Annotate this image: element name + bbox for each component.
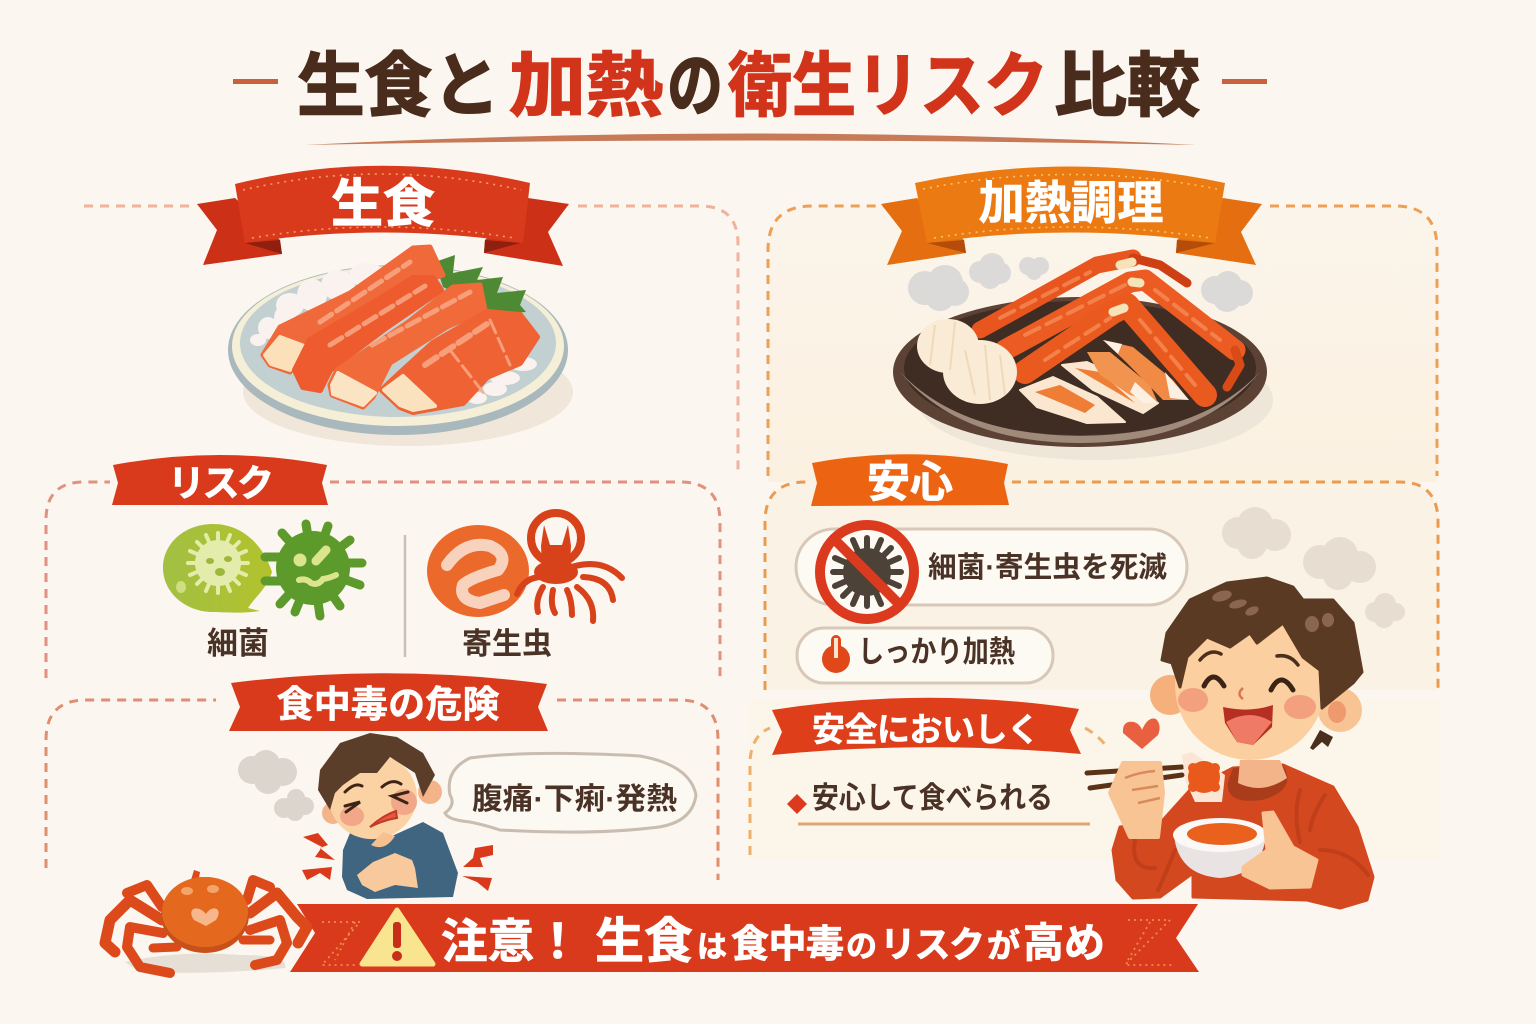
title [233,47,1267,145]
text: can eat safely: 安心して食べられる [812,782,1053,815]
illustration: happy child [1087,578,1373,908]
panel: cooked frame [768,206,1437,476]
title: の [667,47,723,125]
callout banner: warning [290,904,1199,972]
callout banner: warning: は [697,931,727,964]
heading: relief: 安心 [867,459,953,507]
panel: raw food frame [84,206,738,476]
panel: relief [765,454,1438,690]
callout banner: warning: リスク [880,924,985,965]
callout banner: warning: 高め [1023,920,1105,966]
title: 比較 [1054,47,1200,125]
icon: thermometer [822,635,850,673]
label: bacteria: 細菌 [207,626,269,661]
illustration: cooked crab plate [893,253,1273,460]
heading: safe and tasty: 安全においしく [812,711,1040,748]
banner: cooked heading: 加熱調理 [978,177,1164,229]
banner: raw food heading: 生食 [331,176,435,234]
title: 生食と [297,47,500,125]
heading: food poisoning [229,673,548,731]
heading: risk: リスク [168,463,274,504]
callout banner: warning: 食中毒 [731,924,844,966]
banner: raw food heading [197,166,569,266]
steam clouds [908,253,1253,312]
callout banner: warning: が [987,927,1020,964]
panel: safe and tasty [750,698,1108,855]
heading: risk [112,455,328,505]
heading: relief [811,454,1009,507]
icon: no germs [820,525,914,619]
pill: kills germs [796,529,1187,605]
pill: heat thoroughly [797,628,1053,683]
pill: kills germs: 細菌·寄生虫を死滅 [928,551,1167,584]
cut shells [1020,340,1189,423]
crab leg meat [263,247,537,412]
label: parasite: 寄生虫 [462,628,552,661]
collar [1228,765,1287,801]
heading: safe and tasty [772,698,1081,755]
illustration: crab [105,870,307,973]
crab meat [917,319,1017,404]
text: can eat safely [787,782,1090,824]
callout banner: warning: 生食 [595,915,693,969]
icon: pain bolts [302,833,493,891]
title: 加熱 [509,47,663,125]
icon: parasite [427,513,622,621]
title: 衛生リスク [728,47,1048,125]
icon: bacteria [163,524,362,616]
callout banner: warning: の [846,929,877,964]
banner: cooked heading [881,166,1262,265]
garnish: shiso leaves [435,255,526,313]
illustration: sick child [302,733,493,899]
illustration: raw crab plate [228,247,573,446]
icon: warning triangle [362,910,433,964]
pill: heat thoroughly: しっかり加熱 [858,636,1015,669]
heading: food poisoning: 食中毒の危険 [276,684,500,725]
icon: hands on chest [357,853,418,892]
garnish: ice flakes [250,263,537,404]
crab legs [980,258,1240,395]
panel: food poisoning [46,673,718,899]
panel: risk [46,455,720,680]
icon: steam clouds [1222,507,1405,628]
callout: symptoms [445,753,696,832]
callout: symptoms: 腹痛·下痢·発熱 [472,783,677,816]
callout banner: warning: 注意！ [441,915,581,968]
icon: steam [238,750,314,821]
